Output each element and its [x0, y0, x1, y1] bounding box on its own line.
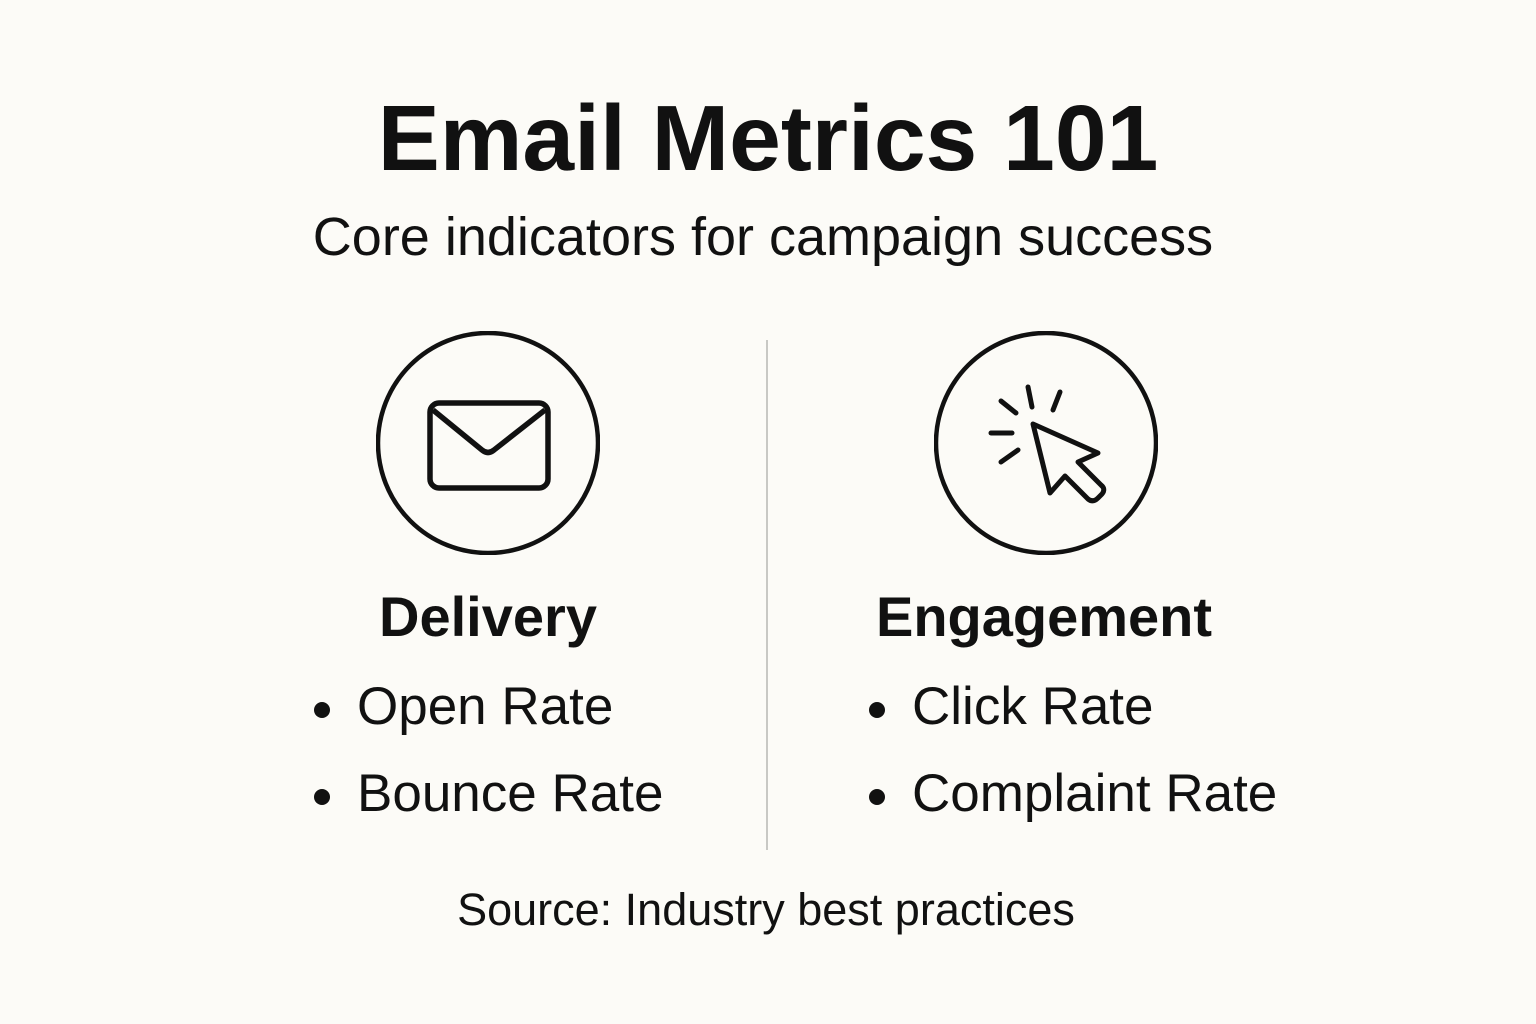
heading: Engagement: Engagement	[876, 585, 1212, 648]
source note: Source: Industry best practices	[457, 884, 1075, 935]
icon: cursor click	[934, 331, 1158, 555]
list: delivery metrics	[314, 677, 663, 823]
icon: envelope	[376, 331, 600, 555]
bullet: Bounce Rate: Bounce Rate	[357, 764, 663, 823]
bullet: Open Rate: Open Rate	[357, 677, 613, 736]
list: engagement metrics	[869, 677, 1277, 823]
bullet: Complaint Rate: Complaint Rate	[912, 764, 1277, 823]
title: Email Metrics 101	[378, 86, 1158, 190]
heading: Delivery: Delivery	[379, 585, 597, 648]
divider	[766, 340, 768, 850]
subtitle: Core indicators for campaign success	[313, 207, 1213, 267]
bullet: Click Rate: Click Rate	[912, 677, 1154, 736]
